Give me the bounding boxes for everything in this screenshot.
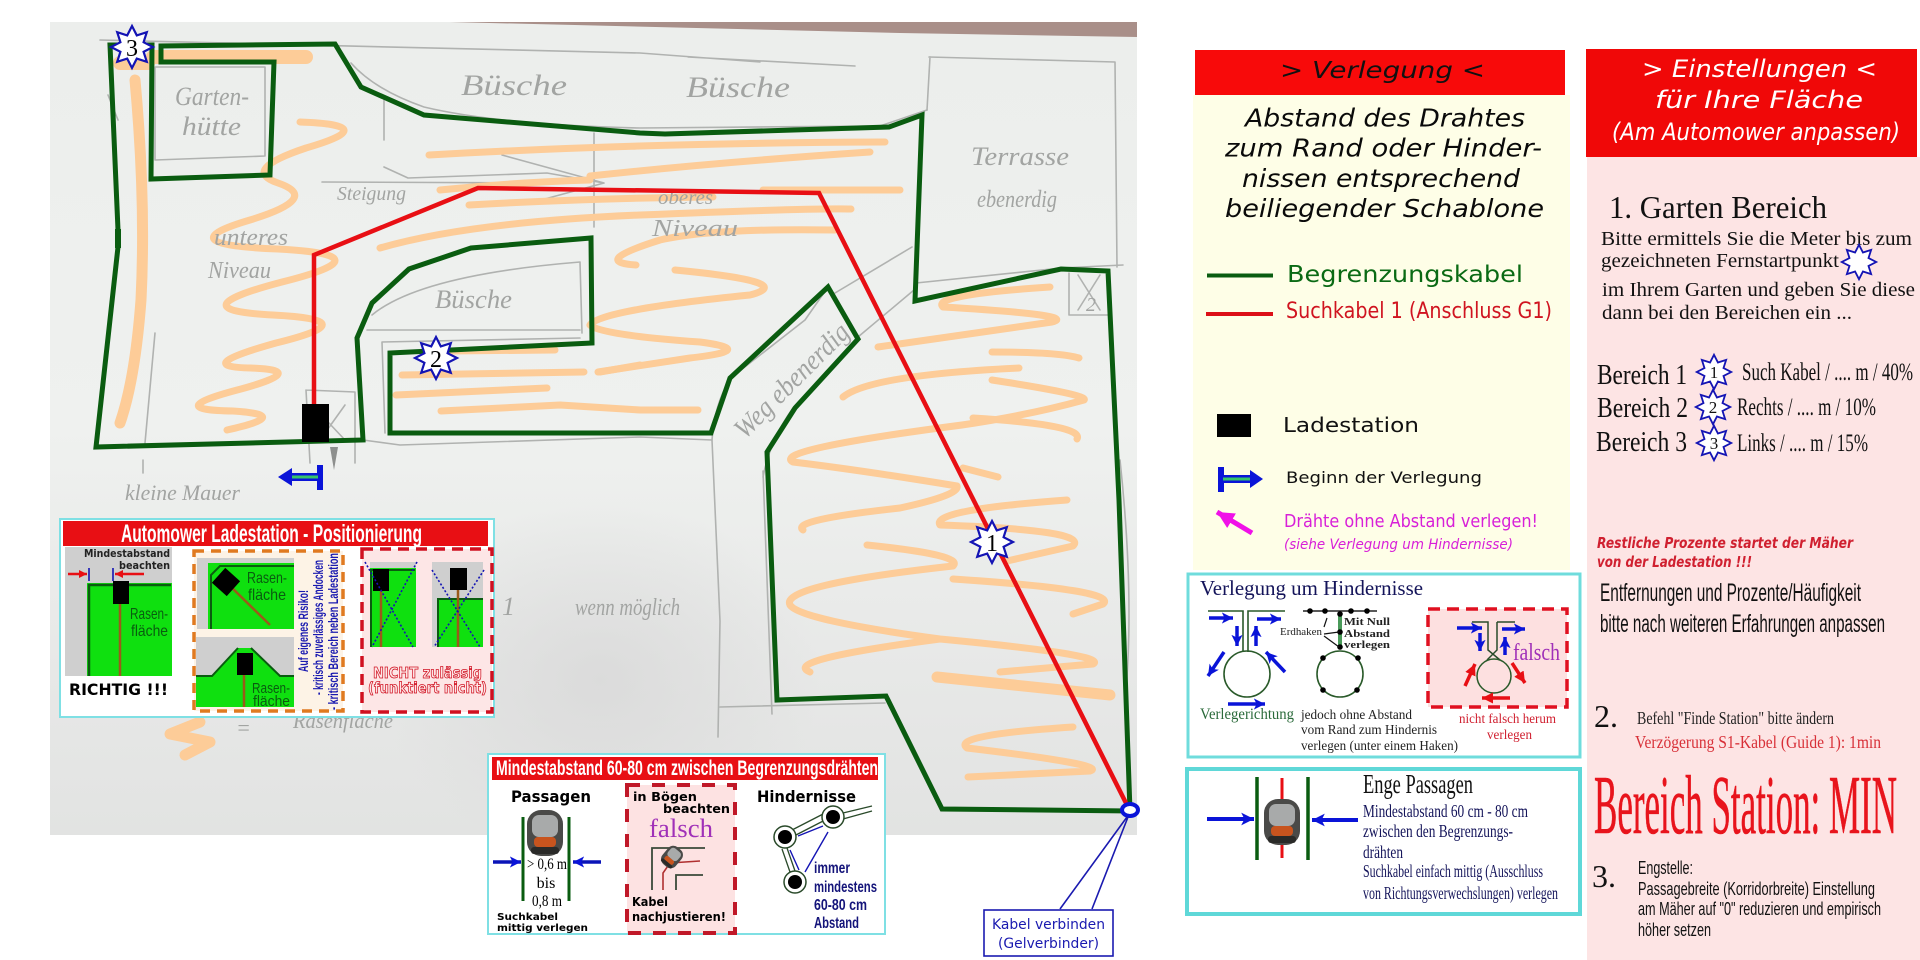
text: garden area: dann bei den Bereichen ein ... [1602, 302, 1852, 324]
diagram: laying direction: Verlegerichtung [1200, 706, 1294, 723]
text: step 2: 2. [1594, 698, 1618, 734]
diagram: curves wrong: beachten [663, 802, 730, 816]
row: area 3: 3 [1710, 434, 1718, 453]
text: narrow passages note: zwischen den Begrenzungs- [1363, 821, 1513, 841]
diagram: correct position: fläche [131, 623, 168, 640]
text: remaining percent: Restliche Prozente startet der Mäher [1597, 534, 1854, 552]
diagram: obstacles: immer [814, 860, 850, 877]
diagram: passages: Passagen [511, 787, 591, 806]
legend: search cable: Suchkabel 1 (Anschluss G1) [1286, 299, 1552, 324]
diagram: earth hooks: vom Rand zum Hindernis [1301, 723, 1437, 738]
heading: minimum distance [492, 757, 878, 780]
diagram: at own risk: fläche [253, 693, 290, 710]
diagram: obstacles: 60-80 cm [814, 897, 867, 914]
text: narrow passages note: Enge Passagen [1363, 769, 1473, 799]
diagram: passages: mittig verlegen [497, 923, 588, 934]
handwritten labels: Weg ebenerdig [728, 317, 856, 445]
legend: start of laying: Beginn der Verlegung [1286, 468, 1482, 487]
row: area 1: Bereich 1 [1597, 360, 1687, 391]
diagram: mower in passage [1207, 777, 1358, 860]
row: area 1 [1597, 355, 1913, 391]
diagram: obstacles: mindestens [814, 879, 877, 896]
diagram: earth hooks: verlegen (unter einem Haken) [1301, 739, 1458, 754]
callout: cable connector [984, 804, 1138, 956]
heading: settings: > Einstellungen < [1642, 55, 1877, 83]
diagram: correct position: Mindestabstand [84, 547, 170, 560]
diagram: correct position: Rasen- [130, 606, 168, 623]
panel: garden plan photo [50, 22, 1137, 860]
row: area 2: 2 [1709, 398, 1717, 417]
icon: start point 3: 3 [126, 36, 138, 62]
row: area 3: Bereich 3 [1596, 427, 1687, 458]
row: area 2: Bereich 2 [1597, 393, 1688, 424]
text: wire distance note: beiliegender Schablone [1225, 194, 1544, 223]
diagram: not allowed [362, 549, 492, 712]
diagram: passages: Suchkabel [497, 912, 558, 923]
diagram: passages: > 0,6 m [527, 856, 567, 873]
diagram: curves wrong [627, 785, 735, 933]
text: step 2: Verzögerung S1-Kabel (Guide 1): 1min [1635, 732, 1881, 753]
text: wire distance note: nissen entsprechend [1242, 164, 1520, 193]
text: narrow passages note: von Richtungsverwechslungen) verlegen [1363, 883, 1558, 904]
icon: start point 2 [415, 337, 457, 379]
heading: around obstacles: Verlegung um Hindernisse [1200, 576, 1423, 600]
icon: charging station [302, 404, 329, 442]
handwritten labels [125, 69, 1096, 740]
diagram: at own risk: Rasen- [247, 570, 287, 587]
panel: laying legend [1193, 50, 1570, 570]
callout: cable connector: Kabel verbinden [992, 917, 1105, 933]
text: remaining percent [1597, 534, 1854, 571]
diagram: laying direction [1200, 611, 1294, 723]
handwritten labels: Büsche [435, 285, 512, 314]
text: narrow passages note: Suchkabel einfach mittig (Ausschluss [1363, 861, 1543, 882]
heading: minimum distance: Mindestabstand 60-80 cm zwischen Begrenzungsdrähten [496, 757, 878, 780]
legend: boundary cable: Begrenzungskabel [1287, 262, 1523, 288]
handwritten labels: unteres [214, 225, 288, 251]
handwritten labels: wenn möglich [575, 595, 680, 621]
legend: wires without gap: (siehe Verlegung um Hindernisse) [1284, 537, 1513, 553]
text: garden area: gezeichneten Fernstartpunkt [1601, 250, 1839, 272]
diagram: at own risk: - kritisch Bereich neben Ladestation [325, 553, 341, 710]
text: garden area: im Ihrem Garten und geben Sie diese [1602, 279, 1915, 301]
text: wire distance note [1224, 104, 1544, 223]
heading: settings [1586, 49, 1917, 157]
text: adjust distances [1600, 579, 1885, 638]
diagram: correct position: beachten [119, 559, 170, 572]
diagram: earth hooks: jedoch ohne Abstand [1300, 708, 1412, 723]
text: step 3: höher setzen [1638, 920, 1711, 940]
legend: charging station [1217, 413, 1419, 437]
diagram: curves wrong: Kabel [632, 895, 668, 909]
diagram: wrong direction [1428, 609, 1567, 743]
diagram: at own risk [194, 551, 343, 711]
diagram: earth hooks: verlegen [1344, 639, 1390, 651]
legend: wires without gap: Drähte ohne Abstand verlegen! [1284, 511, 1538, 532]
diagram: earth hooks [1280, 608, 1458, 754]
diagram: at own risk: Rasen- [252, 680, 290, 697]
icon: start point star [1842, 245, 1876, 279]
boundary cable [96, 44, 1130, 811]
diagram: curves wrong: falsch [649, 814, 713, 843]
text: step 2 [1594, 698, 1881, 753]
handwritten labels: kleine Mauer [125, 480, 240, 505]
diagram: curves wrong: nachjustieren! [632, 910, 726, 924]
icon: start point 1 [971, 521, 1013, 563]
search cable [314, 188, 1130, 811]
diagram: correct position: RICHTIG !!! [69, 680, 168, 699]
handwritten labels: hütte [182, 112, 241, 141]
handwritten labels: ebenerdig [977, 187, 1057, 213]
text: narrow passages note: Mindestabstand 60 cm - 80 cm [1363, 801, 1528, 821]
diagram: wrong direction: verlegen [1487, 728, 1532, 743]
text: step 3: Engstelle: [1638, 858, 1693, 878]
icon: start point 2: 2 [430, 347, 442, 373]
text: wire distance note: Abstand des Drahtes [1243, 104, 1525, 132]
handwritten labels: Niveau [207, 258, 271, 284]
icon: start point 1: 1 [986, 531, 998, 557]
diagram: obstacles: Hindernisse [757, 787, 856, 806]
panel: laying around obstacles [1188, 574, 1580, 757]
text: garden area: 1. Garten Bereich [1609, 189, 1827, 225]
callout: cable connector: (Gelverbinder) [998, 936, 1099, 952]
icon: start of laying arrow [278, 465, 323, 490]
handwritten labels: 1 [502, 592, 515, 621]
text: narrow passages note [1363, 769, 1558, 904]
row: area 2 [1597, 390, 1876, 424]
handwritten labels: Garten- [175, 82, 249, 111]
diagram: earth hooks: Abstand [1344, 628, 1390, 640]
handwritten labels: 2 [1086, 294, 1096, 316]
heading: positioning: Automower Ladestation - Positionierung [121, 520, 422, 548]
icon: start point 3 [111, 26, 153, 68]
handwritten labels: Terrasse [971, 142, 1069, 171]
handwritten labels: Rasenfläche [292, 708, 393, 733]
heading: settings: für Ihre Fläche [1655, 86, 1863, 114]
diagram: obstacles: Abstand [814, 915, 859, 932]
diagram: at own risk: - kritisch zuverlässiges Andocken [310, 560, 326, 695]
text: remaining percent: von der Ladestation !!! [1597, 553, 1752, 571]
diagram: wrong direction: falsch [1513, 640, 1560, 666]
handwritten labels: Büsche [686, 71, 790, 104]
diagram: correct position [65, 547, 172, 699]
panel: minimum distance [488, 754, 885, 934]
diagram: passages: bis [537, 875, 555, 892]
legend: charging station: Ladestation [1283, 413, 1419, 437]
panel: charging station positioning [60, 519, 494, 717]
diagram: at own risk: fläche [248, 587, 286, 604]
diagram: not allowed: (funktiert nicht) [368, 679, 487, 697]
handwritten labels: Steigung [337, 183, 406, 205]
panel: settings [1586, 49, 1920, 960]
diagram: passages [493, 787, 601, 934]
diagram: passages: 0,8 m [532, 893, 562, 910]
text: garden area [1601, 189, 1915, 324]
text: garden area: Bitte ermittels Sie die Meter bis zum [1601, 228, 1912, 250]
heading: positioning [63, 520, 488, 548]
handwritten labels: Büsche [461, 69, 567, 102]
handwritten labels: oberes [658, 187, 713, 209]
text: step 3 [1592, 858, 1881, 940]
heading: Verlegung [1195, 50, 1565, 95]
diagram: not allowed: NICHT zulässig [373, 664, 482, 682]
text: narrow passages note: drähten [1363, 842, 1403, 862]
panel: narrow passages [1187, 769, 1580, 914]
diagram: curves wrong: in Bögen [633, 790, 697, 804]
handwritten labels: = [236, 715, 251, 740]
text: step 3: 3. [1592, 858, 1616, 894]
handwritten labels: Niveau [651, 216, 738, 242]
diagram: at own risk: Auf eigenes Risiko! [295, 590, 311, 672]
legend: start of laying [1218, 467, 1482, 492]
text: wire distance note: zum Rand oder Hinder- [1224, 134, 1542, 162]
diagram: earth hooks: Erdhaken [1280, 626, 1322, 638]
text: step 2: Befehl "Finde Station" bitte ändern [1637, 708, 1834, 728]
diagram: earth hooks: Mit Null [1344, 616, 1390, 628]
heading: Verlegung: > Verlegung < [1280, 58, 1485, 84]
legend: wires without gap [1217, 511, 1538, 553]
diagram: obstacles [757, 787, 877, 932]
row: area 1: 1 [1710, 363, 1718, 382]
row: area 3 [1596, 426, 1868, 460]
diagram: wrong direction: nicht falsch herum [1459, 712, 1556, 727]
